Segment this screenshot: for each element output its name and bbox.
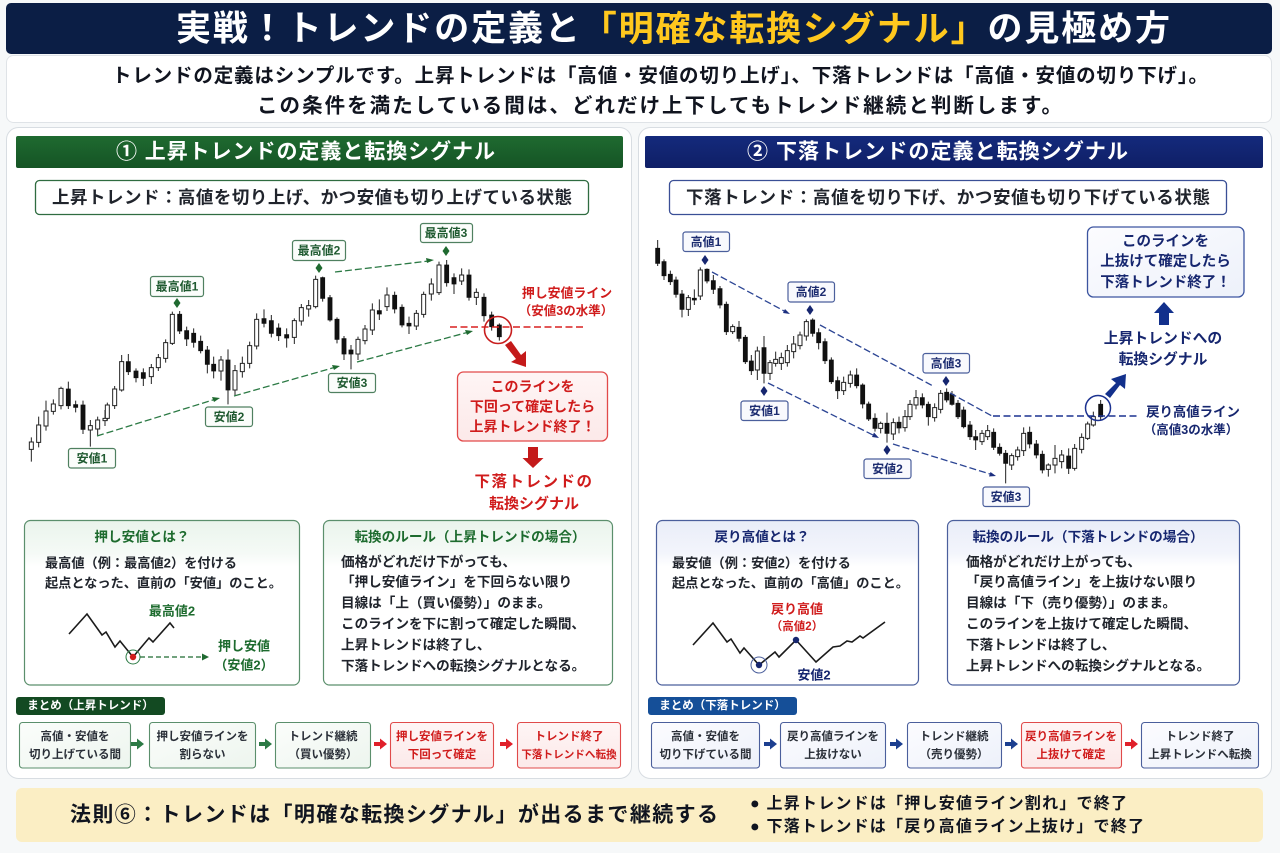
summary flow: uptrend: 押し安値ラインを bbox=[396, 729, 488, 743]
callout: downtrend end bbox=[1088, 227, 1244, 297]
title banner: 実戦！トレンドの定義と「明確な転換シグナル」の見極め方 bbox=[176, 10, 1170, 48]
info box: 押し安値とは: 起点となった、直前の「安値」のこと。 bbox=[45, 574, 282, 590]
callout: uptrend end bbox=[458, 372, 608, 441]
downtrend dashed arrows bbox=[712, 272, 996, 476]
mini chart: pullback low: （安値2） bbox=[214, 658, 274, 672]
summary flow: uptrend: 割らない bbox=[180, 747, 226, 761]
summary tag: uptrend: まとめ（上昇トレンド） bbox=[27, 698, 154, 712]
label: 高値3 bbox=[923, 354, 970, 386]
summary tag: uptrend bbox=[16, 697, 165, 715]
label: 安値3: 安値3 bbox=[337, 375, 368, 390]
footer law band: 法則⑥：トレンドは「明確な転換シグナル」が出るまで継続する bbox=[70, 802, 718, 826]
summary flow: downtrend: 戻り高値ラインを bbox=[1025, 729, 1117, 743]
mini chart: pullback high: （高値2） bbox=[771, 619, 823, 633]
signal text: uptrend: 転換シグナル bbox=[1119, 350, 1208, 368]
mini chart: pullback high: 安値2 bbox=[797, 668, 831, 682]
resistance line with circle bbox=[993, 396, 1137, 420]
info box: uptrend rule: 目線は「上（買い優勢）」のまま。 bbox=[341, 594, 551, 610]
line label: 押し安値ライン bbox=[519, 286, 613, 318]
info box: 戻り高値とは: 最安値（例：安値2）を付ける bbox=[672, 556, 851, 570]
uptrend candlestick chart bbox=[29, 260, 501, 462]
label: 高値2 bbox=[788, 282, 834, 315]
label: 安値1 bbox=[68, 448, 116, 468]
downtrend definition bbox=[670, 180, 1226, 214]
label: 安値2: 安値2 bbox=[872, 461, 903, 476]
uptrend heading: ① 上昇トレンドの定義と転換シグナル bbox=[116, 140, 495, 164]
summary flow: uptrend: 下落トレンドへ転換 bbox=[521, 748, 617, 761]
info box: downtrend rule: 価格がどれだけ上がっても、 bbox=[966, 554, 1141, 570]
summary flow: downtrend: トレンド継続 bbox=[920, 729, 989, 743]
info box: downtrend rule: このラインを上抜けて確定した瞬間、 bbox=[966, 616, 1197, 632]
label: 安値2 bbox=[206, 407, 252, 426]
summary flow: downtrend: 上抜けて確定 bbox=[1036, 747, 1106, 761]
footer bullets bbox=[750, 794, 1144, 836]
footer law band bbox=[16, 788, 1263, 842]
label: 高値2: 高値2 bbox=[796, 284, 827, 299]
summary flow: uptrend: 下回って確定 bbox=[408, 747, 477, 761]
info box: 戻り高値とは: 起点となった、直前の「高値」のこと。 bbox=[672, 574, 909, 590]
arrow: up navy bbox=[1154, 302, 1174, 325]
summary flow: downtrend: 上昇トレンドへ転換 bbox=[1148, 747, 1252, 761]
label: 安値3 bbox=[328, 374, 376, 392]
mini chart: pullback low bbox=[69, 604, 274, 672]
intro text block: この条件を満たしている間は、どれだけ上下してもトレンド継続と判断します。 bbox=[257, 94, 1062, 118]
downtrend heading: ② 下落トレンドの定義と転換シグナル bbox=[747, 140, 1128, 164]
label: 安値3: 安値3 bbox=[991, 489, 1022, 504]
downtrend definition: 下落トレンド：高値を切り下げ、かつ安値も切り下げている状態 bbox=[686, 188, 1210, 208]
summary tag: downtrend bbox=[648, 697, 797, 715]
summary flow: uptrend: 高値・安値を bbox=[40, 729, 110, 743]
line label: 戻り高値ライン: （高値3の水準） bbox=[1144, 422, 1238, 437]
uptrend heading bbox=[16, 136, 623, 168]
info box: downtrend rule: 目線は「下（売り優勢）」のまま。 bbox=[966, 594, 1176, 610]
label: 安値3 bbox=[983, 487, 1030, 506]
footer bullets: ● 下落トレンドは「戻り高値ライン上抜け」で終了 bbox=[750, 816, 1144, 836]
summary flow: uptrend: 押し安値ラインを bbox=[156, 729, 248, 743]
callout: uptrend end: 下回って確定したら bbox=[470, 398, 595, 414]
label: 最高値1: 最高値1 bbox=[156, 278, 199, 294]
mini chart: pullback high: 戻り高値 bbox=[771, 602, 823, 616]
callout: uptrend end: 上昇トレンド終了！ bbox=[470, 418, 596, 434]
label: 安値1: 安値1 bbox=[77, 450, 108, 466]
info box: uptrend rule: 「押し安値ライン」を下回らない限り bbox=[341, 574, 572, 590]
downtrend candlestick chart bbox=[656, 240, 1103, 483]
uptrend dashed arrows bbox=[97, 258, 473, 436]
info box: downtrend rule: 下落トレンドは終了し、 bbox=[966, 638, 1116, 652]
footer bullets: ● 上昇トレンドは「押し安値ライン割れ」で終了 bbox=[750, 794, 1127, 812]
label: 安値2 bbox=[864, 445, 911, 478]
label: 最高値2 bbox=[292, 240, 346, 273]
callout: uptrend end: このラインを bbox=[490, 378, 574, 394]
panel: uptrend bbox=[6, 128, 632, 778]
info box: uptrend rule: 価格がどれだけ下がっても、 bbox=[341, 554, 516, 570]
callout: downtrend end: 下落トレンド終了！ bbox=[1100, 273, 1231, 291]
summary flow: uptrend: 切り上げている間 bbox=[29, 747, 121, 761]
arrow: down right red bbox=[505, 341, 526, 367]
info box: downtrend rule: 「戻り高値ライン」を上抜けない限り bbox=[966, 574, 1197, 590]
signal text: uptrend: 上昇トレンドへの bbox=[1104, 330, 1222, 347]
info box: 戻り高値とは: 戻り高値とは？ bbox=[714, 528, 810, 544]
summary flow: downtrend bbox=[652, 722, 1258, 768]
line label: 押し安値ライン: （安値3の水準） bbox=[519, 303, 613, 318]
label: 最高値1 bbox=[150, 276, 204, 308]
intro text block bbox=[6, 56, 1272, 122]
summary flow: downtrend: 上抜けない bbox=[804, 747, 862, 761]
summary flow: downtrend: トレンド終了 bbox=[1166, 729, 1234, 743]
label: 安値1: 安値1 bbox=[749, 403, 780, 418]
summary flow: downtrend: （売り優勢） bbox=[920, 747, 988, 761]
info box: uptrend rule: 下落トレンドへの転換シグナルとなる。 bbox=[341, 658, 585, 674]
summary flow: downtrend: 切り下げている間 bbox=[660, 747, 752, 761]
summary flow: uptrend bbox=[20, 722, 620, 768]
info box: uptrend rule: 上昇トレンドは終了し、 bbox=[341, 638, 491, 652]
info box: downtrend rule: 上昇トレンドへの転換シグナルとなる。 bbox=[966, 658, 1210, 674]
arrow: up right navy bbox=[1105, 374, 1126, 398]
intro text block: トレンドの定義はシンプルです。上昇トレンドは「高値・安値の切り上げ」、下落トレンドは「高値・安値の切り下げ」。 bbox=[112, 64, 1208, 87]
signal text: downtrend: 転換シグナル bbox=[489, 494, 579, 512]
info box: downtrend rule: 転換のルール（下落トレンドの場合） bbox=[972, 528, 1204, 544]
summary flow: downtrend: 高値・安値を bbox=[671, 729, 740, 743]
info box: 押し安値とは: 最高値（例：最高値2）を付ける bbox=[45, 554, 237, 570]
line label: 戻り高値ライン: 戻り高値ライン bbox=[1146, 404, 1240, 420]
info box: 戻り高値とは bbox=[656, 520, 918, 685]
info box: uptrend rule: このラインを下に割って確定した瞬間、 bbox=[341, 616, 585, 632]
info box: 押し安値とは bbox=[24, 520, 300, 685]
panel: downtrend bbox=[638, 128, 1272, 778]
signal text: downtrend bbox=[474, 472, 594, 512]
info box: downtrend rule bbox=[948, 520, 1240, 685]
arrow: down red bbox=[522, 447, 544, 468]
summary tag: downtrend: まとめ（下落トレンド） bbox=[659, 698, 786, 712]
label: 高値1 bbox=[683, 232, 730, 265]
mini chart: pullback high bbox=[693, 602, 885, 682]
summary flow: uptrend: （買い優勢） bbox=[288, 747, 358, 761]
signal text: downtrend: 下落トレンドの bbox=[474, 472, 594, 490]
label: 安値2: 安値2 bbox=[214, 409, 245, 424]
callout: downtrend end: 上抜けて確定したら bbox=[1100, 252, 1231, 270]
label: 高値1: 高値1 bbox=[691, 234, 722, 249]
title banner bbox=[6, 3, 1272, 54]
summary flow: uptrend: トレンド終了 bbox=[534, 729, 604, 743]
line label: 戻り高値ライン bbox=[1144, 404, 1240, 437]
summary flow: downtrend: 戻り高値ラインを bbox=[787, 729, 879, 743]
label: 最高値2: 最高値2 bbox=[298, 242, 341, 258]
callout: downtrend end: このラインを bbox=[1122, 233, 1209, 250]
label: 最高値3: 最高値3 bbox=[425, 225, 468, 240]
summary flow: uptrend: トレンド継続 bbox=[288, 729, 358, 743]
info box: 押し安値とは: 押し安値とは？ bbox=[94, 528, 190, 544]
mini chart: pullback low: 最高値2 bbox=[149, 604, 195, 618]
label: 安値1 bbox=[741, 386, 788, 420]
info box: uptrend rule bbox=[324, 520, 612, 685]
support line with circle bbox=[450, 316, 583, 344]
signal text: uptrend bbox=[1104, 330, 1222, 368]
downtrend heading bbox=[645, 136, 1263, 168]
info box: uptrend rule: 転換のルール（上昇トレンドの場合） bbox=[354, 528, 586, 544]
label: 高値3: 高値3 bbox=[931, 356, 962, 370]
line label: 押し安値ライン: 押し安値ライン bbox=[522, 286, 612, 300]
uptrend definition: 上昇トレンド：高値を切り上げ、かつ安値も切り上げている状態 bbox=[52, 188, 572, 208]
label: 最高値3 bbox=[420, 224, 472, 256]
mini chart: pullback low: 押し安値 bbox=[218, 638, 270, 654]
uptrend definition bbox=[36, 180, 588, 214]
